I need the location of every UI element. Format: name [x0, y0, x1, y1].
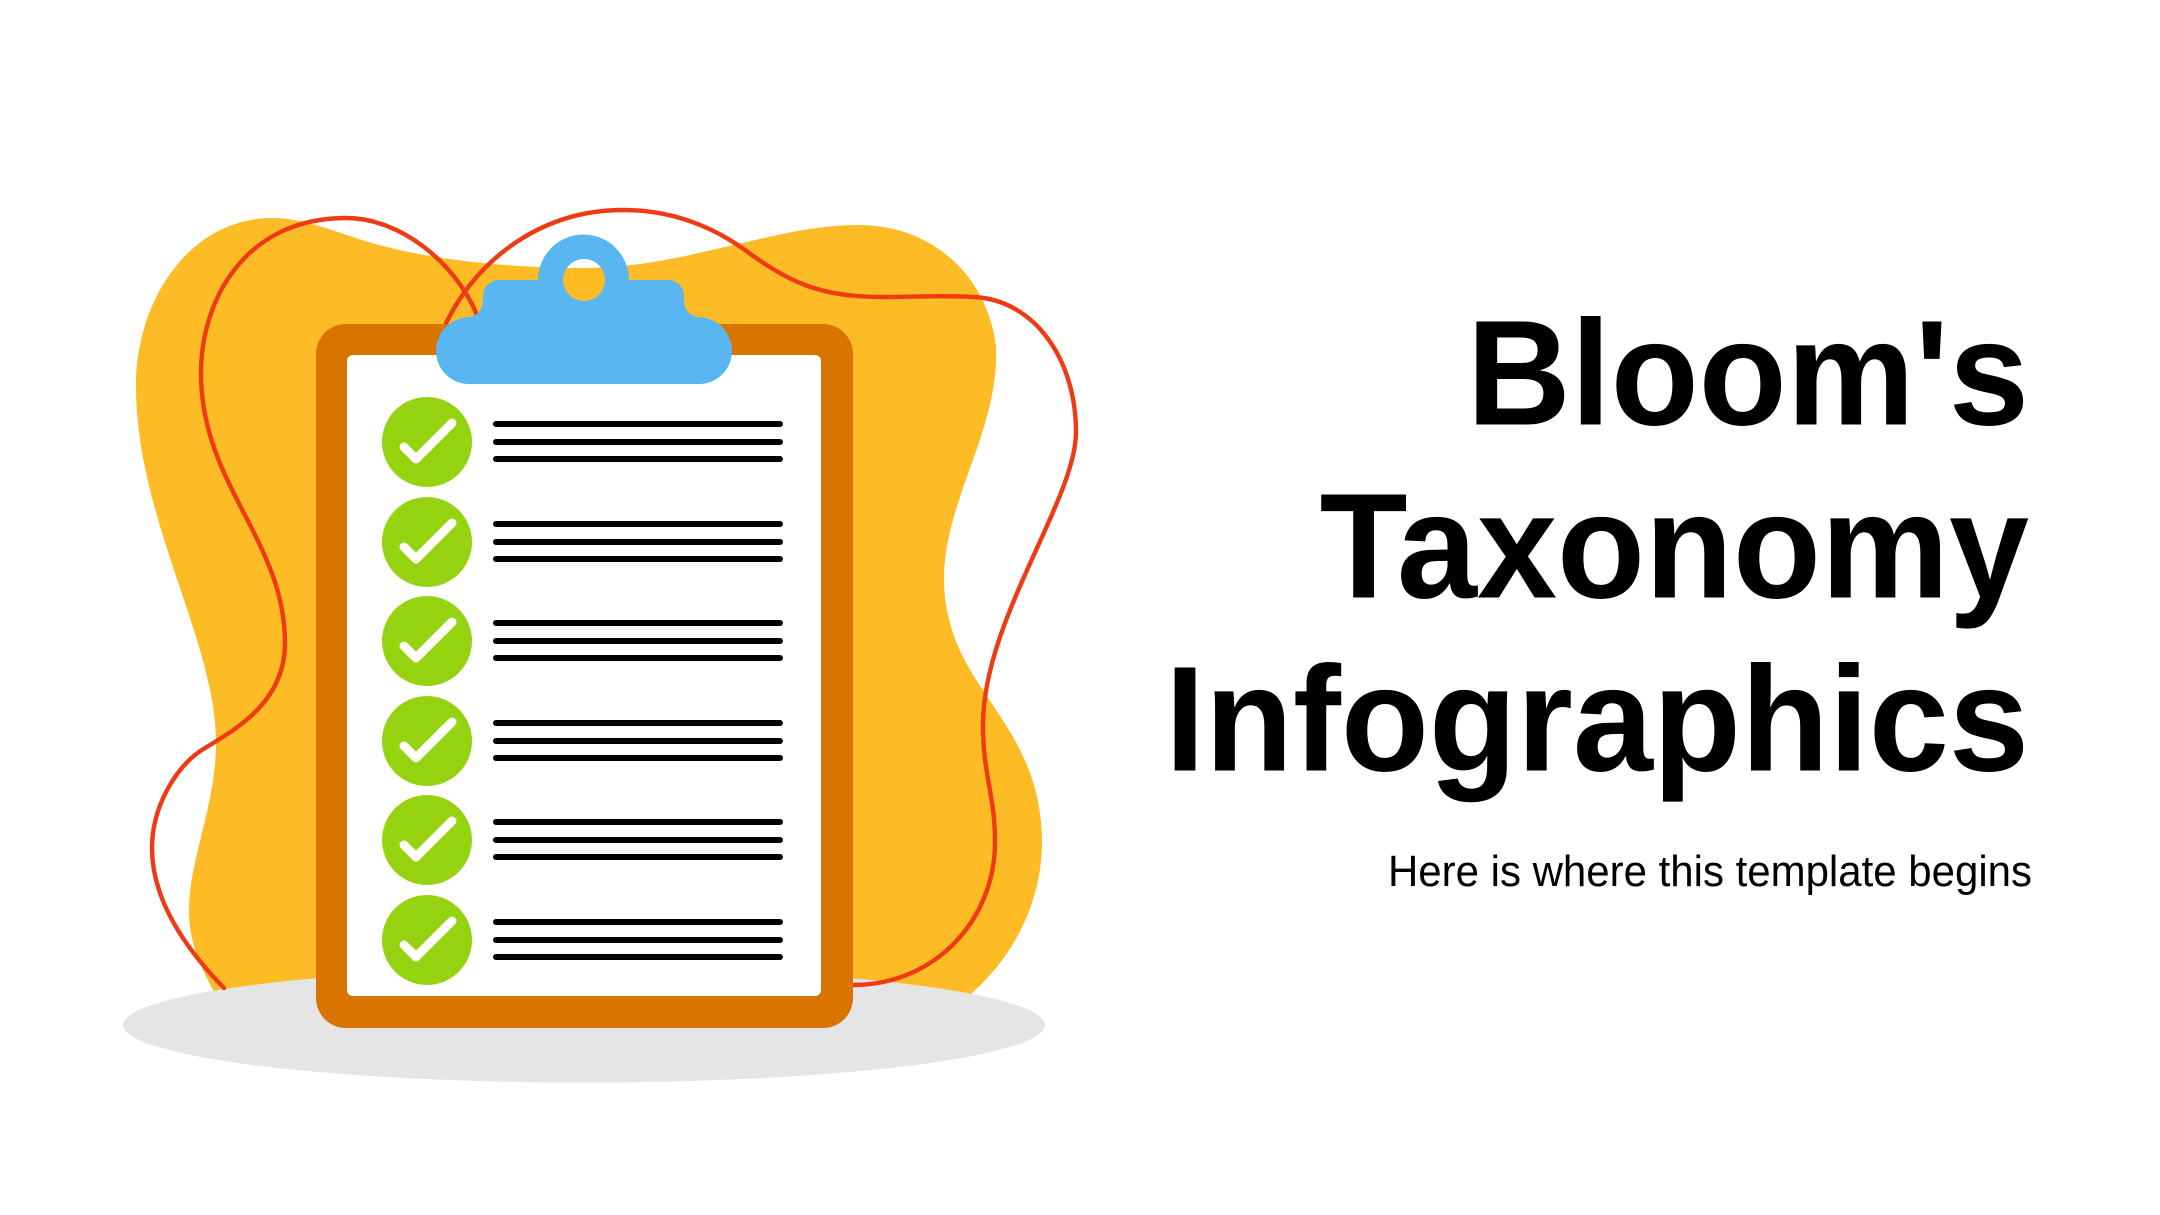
clipboard board — [316, 324, 853, 1028]
checklist row 5 — [382, 795, 780, 885]
clipboard — [316, 234, 853, 1028]
checklist row 6 — [382, 895, 780, 985]
checklist row 4 — [382, 696, 780, 786]
title: Taxonomy — [1320, 463, 2029, 630]
title — [1165, 290, 2029, 803]
subtitle: Here is where this template begins — [1388, 847, 2032, 896]
clipboard clip — [436, 234, 732, 384]
checklist row 2 — [382, 497, 780, 587]
title: Infographics — [1165, 636, 2029, 803]
checklist row 3 — [382, 596, 780, 686]
title: Bloom's — [1467, 290, 2029, 457]
ground shadow ellipse — [123, 968, 1045, 1082]
paper sheet — [347, 355, 821, 996]
checklist row 1 — [382, 397, 780, 487]
red outline curve — [152, 210, 1076, 988]
yellow blob background — [136, 218, 1042, 1030]
